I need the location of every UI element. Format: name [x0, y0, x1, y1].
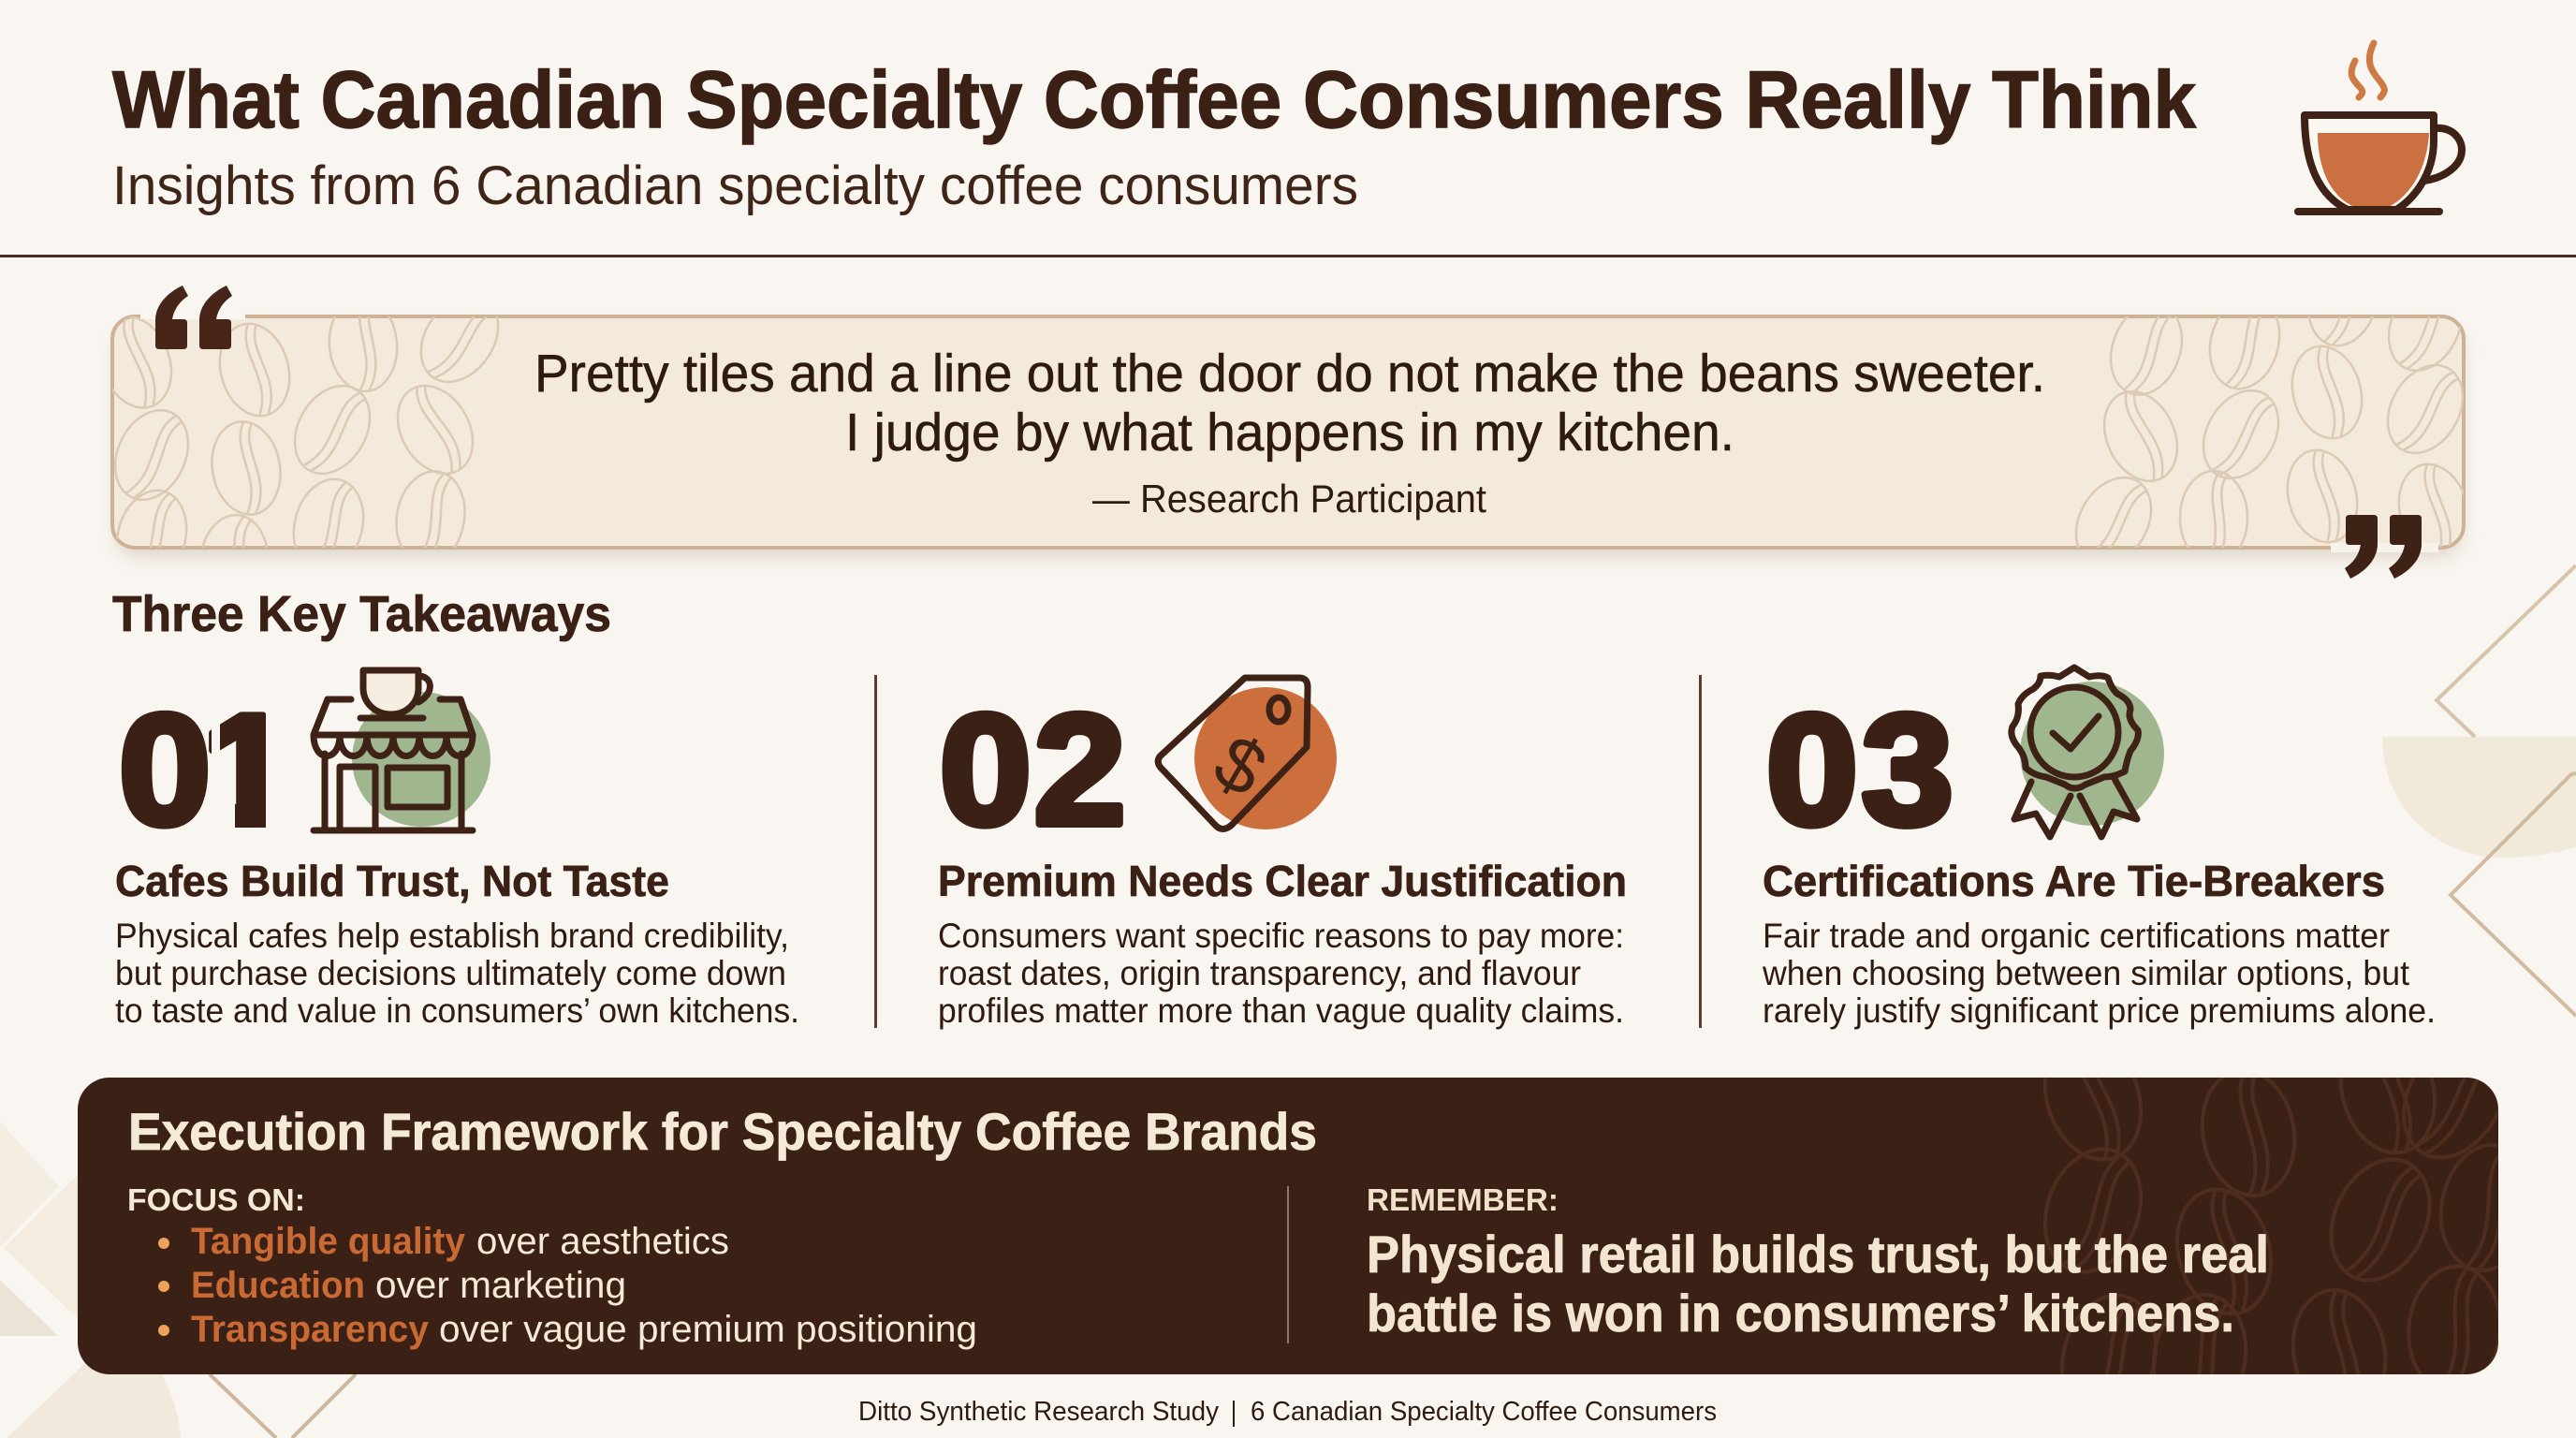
body 01: but purchase decisions ultimately come down: [115, 954, 786, 992]
icon: cafe storefront: [314, 670, 490, 830]
coffee bean pattern: left: [112, 316, 500, 548]
heading: three key takeaways: Three Key Takeaways: [112, 586, 611, 642]
icon: opening quote mark: [155, 286, 232, 349]
footer source line: Ditto Synthetic Research Study: [858, 1397, 1219, 1427]
body 01: Physical cafes help establish brand credibility,: [115, 917, 789, 955]
icon: steaming coffee cup: [2294, 43, 2462, 215]
body 03: Fair trade and organic certifications matter: [1763, 917, 2390, 955]
number 02: 02: [940, 682, 1126, 858]
body 01: [115, 917, 799, 1030]
number 03: 03: [1766, 682, 1954, 858]
focus on list: FOCUS ON:: [127, 1182, 305, 1217]
icon: closing quote mark: [2345, 515, 2422, 579]
heading 01: Cafes Build Trust, Not Taste: [115, 857, 669, 905]
body 02: Consumers want specific reasons to pay more:: [938, 917, 1624, 955]
body 02: [938, 917, 1624, 1030]
remember message: REMEMBER:: [1367, 1182, 1559, 1217]
remember message: Physical retail builds trust, but the real: [1367, 1225, 2269, 1284]
body 02: profiles matter more than vague quality claims.: [938, 991, 1624, 1030]
takeaway 02: [938, 678, 1627, 1030]
body 03: when choosing between similar options, but: [1762, 954, 2410, 992]
quote text: I judge by what happens in my kitchen.: [845, 403, 1734, 462]
icon: price tag: $: [1200, 718, 1280, 814]
panel heading: Execution Framework for Specialty Coffee Brands: [128, 1102, 1317, 1161]
body 03: [1762, 917, 2436, 1030]
footer source line: [858, 1397, 1717, 1427]
background geometric shapes: bottom left: [0, 1122, 356, 1438]
footer source line: 6 Canadian Specialty Coffee Consumers: [1251, 1397, 1717, 1427]
body 01: to taste and value in consumers’ own kitchens.: [115, 991, 799, 1030]
focus on list: Tangible quality: [191, 1221, 466, 1262]
remember message: battle is won in consumers’ kitchens.: [1367, 1284, 2234, 1343]
focus on list: over vague premium positioning: [439, 1309, 977, 1350]
coffee bean pattern: right: [2074, 316, 2464, 548]
background geometric shapes: right: [2382, 565, 2576, 1016]
quote text: Pretty tiles and a line out the door do not make the beans sweeter.: [534, 344, 2045, 404]
header subtitle: Insights from 6 Canadian specialty coffee consumers: [112, 155, 1358, 216]
panel: execution framework: [78, 1078, 2498, 1374]
icon: certification rosette: [2012, 668, 2164, 837]
body 02: roast dates, origin transparency, and flavour: [938, 954, 1581, 992]
header title: What Canadian Specialty Coffee Consumers Really Think: [112, 55, 2196, 145]
heading 02: Premium Needs Clear Justification: [938, 857, 1627, 905]
focus on list: Transparency: [191, 1309, 430, 1350]
panel: participant quote: [109, 286, 2469, 579]
heading 03: Certifications Are Tie-Breakers: [1763, 857, 2385, 905]
focus on list: over marketing: [375, 1265, 626, 1306]
coffee bean pattern: panel: [2043, 1078, 2498, 1374]
icon: price tag: [1158, 678, 1337, 829]
focus on list: over aesthetics: [476, 1221, 729, 1262]
quote text: [534, 344, 2045, 521]
takeaway 01: [115, 670, 799, 1030]
focus on list: Education: [191, 1265, 365, 1306]
number 01: 01: [119, 682, 293, 858]
quote text: — Research Participant: [1092, 477, 1486, 521]
focus on list: [127, 1182, 977, 1350]
remember message: [1367, 1182, 2269, 1343]
takeaway 03: [1762, 668, 2436, 1030]
body 03: rarely justify significant price premiums alone.: [1763, 991, 2436, 1030]
